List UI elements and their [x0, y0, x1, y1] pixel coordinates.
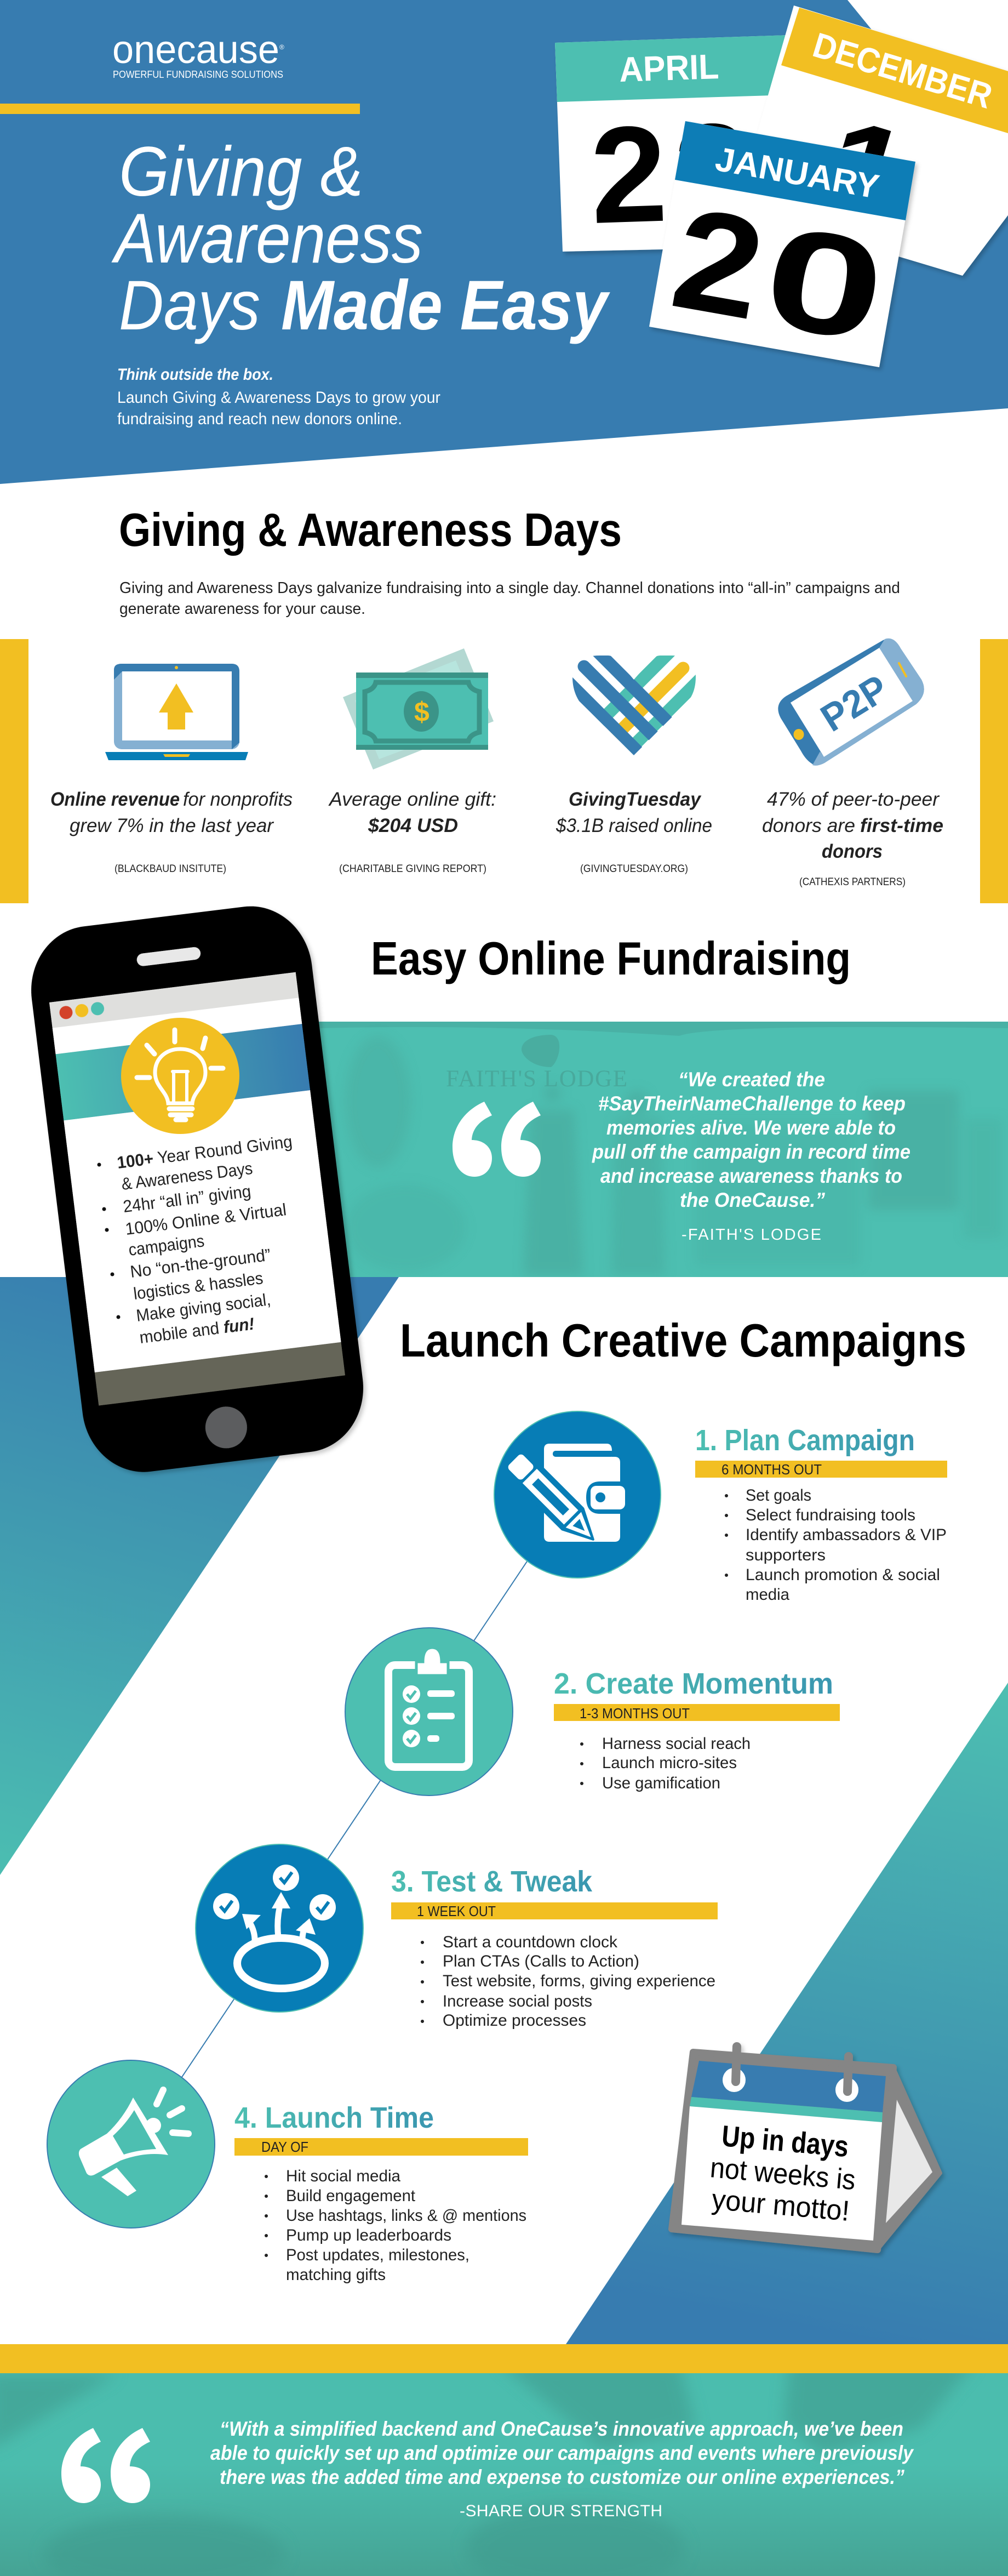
stat: peer-to-peer: first-time	[860, 815, 943, 836]
step 2: Create Momentum	[345, 1628, 840, 1796]
icon: megaphone	[47, 2060, 215, 2228]
stat: GivingTuesday	[555, 789, 712, 875]
stat: average online gift: Average online gift:	[328, 789, 496, 810]
quote text: pull off the campaign in record time	[592, 1141, 910, 1163]
stat: GivingTuesday: (GIVINGTUESDAY.ORG)	[580, 863, 688, 875]
phone list	[98, 1132, 293, 1347]
calendar text	[709, 2119, 857, 2227]
quote text: the OneCause.”	[680, 1189, 825, 1211]
title: Days	[119, 266, 260, 345]
hero intro text	[117, 366, 440, 428]
quote text: “We created the	[678, 1068, 825, 1091]
quote text: there was the added time and expense to customize our online experiences.”	[220, 2466, 904, 2488]
intro paragraph	[119, 579, 900, 618]
stat: online revenue	[50, 789, 293, 875]
phone list: campaigns	[128, 1231, 205, 1259]
phone list: & Awareness Days	[121, 1159, 254, 1194]
timing bar	[391, 1902, 718, 1919]
step heading: 2. Create Momentum	[554, 1667, 833, 1700]
task list: Start a countdown clock	[443, 1933, 618, 1951]
step 4: Launch Time	[47, 2060, 528, 2284]
stat: peer-to-peer: donors	[822, 841, 883, 862]
stat: online revenue: (BLACKBAUD INSITUTE)	[114, 863, 226, 875]
logo: onecause	[112, 28, 279, 72]
side bar left	[0, 639, 28, 903]
task list: Plan CTAs (Calls to Action)	[443, 1952, 639, 1970]
calendar page: December	[736, 5, 1008, 276]
stat: peer-to-peer: (CATHEXIS PARTNERS)	[799, 876, 906, 888]
stat: peer-to-peer	[762, 789, 943, 888]
stat: peer-to-peer: 47% of peer-to-peer	[767, 789, 940, 810]
panel: hero background	[0, 0, 1008, 484]
task list: Select fundraising tools	[746, 1506, 915, 1524]
calendar page: January: 2	[662, 177, 775, 350]
task list: Set goals	[746, 1486, 811, 1504]
desk calendar callout	[672, 2047, 941, 2250]
background diagonal left	[0, 1277, 399, 1875]
phone body	[24, 899, 371, 1479]
task list: Use hashtags, links & @ mentions	[286, 2207, 526, 2225]
icon: P2P phone: P2P	[814, 666, 896, 740]
logo: POWERFUL FUNDRAISING SOLUTIONS	[113, 69, 283, 80]
title: Giving &	[119, 133, 363, 211]
step heading: 3. Test & Tweak	[391, 1865, 593, 1898]
task list: media	[746, 1586, 789, 1604]
quote text: memories alive. We were able to	[606, 1116, 896, 1139]
calendar page: April	[555, 35, 813, 252]
intro paragraph: generate awareness for your cause.	[119, 600, 365, 618]
stat: online revenue: grew 7% in the last year	[70, 815, 274, 836]
calendar page: December: DECEMBER	[809, 25, 996, 116]
stat: peer-to-peer: donors are	[762, 815, 855, 836]
title: Awareness	[111, 200, 423, 278]
title: Made Easy	[281, 266, 610, 345]
calendar page: January: 0	[753, 195, 896, 373]
phone list: 100% Online & Virtual	[124, 1200, 288, 1239]
phone	[24, 899, 371, 1479]
stat: average online gift: $204 USD	[368, 815, 458, 836]
background diagonal right	[566, 1683, 1008, 2344]
task list: Identify ambassadors & VIP	[746, 1526, 947, 1544]
quote text: “With a simplified backend and OneCause’s innovative approach, we’ve been	[220, 2418, 903, 2440]
icon: money: $	[414, 697, 429, 727]
phone list: Make giving social,	[135, 1290, 272, 1325]
phone list: 100+ Year Round Giving	[116, 1132, 293, 1172]
task list: matching gifts	[286, 2266, 386, 2284]
quote text: able to quickly set up and optimize our campaigns and events where previously	[210, 2442, 914, 2464]
task list: Launch promotion & social	[746, 1566, 940, 1584]
phone list: No “on-the-ground”	[129, 1245, 272, 1281]
icon: arrows and checks	[196, 1844, 363, 2012]
hero accent bar	[0, 104, 360, 114]
logo: ®	[279, 43, 284, 51]
icon: laptop	[105, 664, 248, 760]
task list	[580, 1735, 751, 1792]
hero intro text: Launch Giving & Awareness Days to grow your	[117, 389, 440, 407]
stat: average online gift	[328, 789, 496, 875]
calendar page: April: 22	[588, 94, 753, 252]
calendar text: Up in days	[720, 2119, 850, 2163]
icon: quote mark	[453, 1102, 541, 1177]
phone list: mobile and fun!	[139, 1314, 255, 1347]
step heading: 1. Plan Campaign	[695, 1424, 915, 1457]
stat: average online gift: (CHARITABLE GIVING REPORT)	[339, 863, 486, 875]
quote text: #SayTheirNameChallenge to keep	[598, 1092, 906, 1115]
icon: money	[343, 648, 494, 770]
icon: light bulb	[121, 1018, 239, 1134]
heading: Easy Online Fundraising: Easy Online Fundraising	[371, 933, 851, 985]
photo texture	[0, 2373, 967, 2554]
calendar page: December: 1	[807, 88, 924, 257]
calendar text: your motto!	[711, 2184, 851, 2227]
task list: Use gamification	[602, 1774, 720, 1792]
icon: GivingTuesday heart	[572, 656, 696, 755]
quote text: -SHARE OUR STRENGTH	[460, 2502, 662, 2520]
timing bar	[234, 2138, 528, 2156]
heading: Launch Creative Campaigns: Launch Creative Campaigns	[400, 1315, 966, 1367]
timing bar: DAY OF	[261, 2139, 308, 2155]
timeline connector	[130, 1485, 578, 2154]
step 3: Test and Tweak	[196, 1844, 718, 2030]
task list: Optimize processes	[443, 2011, 586, 2030]
intro paragraph: Giving and Awareness Days galvanize fundraising into a single day. Channel donations into “all-in” campaigns and	[119, 579, 900, 597]
task list	[421, 1933, 715, 2030]
task list: Hit social media	[286, 2167, 400, 2185]
task list: Launch micro-sites	[602, 1754, 737, 1772]
hero intro text: fundraising and reach new donors online.	[117, 410, 402, 428]
icon: clipboard	[345, 1628, 513, 1796]
calendar text: not weeks is	[709, 2152, 857, 2196]
stat: GivingTuesday: GivingTuesday	[569, 789, 701, 810]
task list: Harness social reach	[602, 1735, 751, 1753]
quote text: -FAITH'S LODGE	[681, 1226, 821, 1244]
phone list: logistics & hassles	[133, 1268, 264, 1303]
calendar page: January	[649, 121, 915, 373]
task list: supporters	[746, 1546, 826, 1564]
icon: wallet and pencil	[494, 1411, 661, 1578]
heading: Giving and Awareness Days: Giving & Awareness Days	[119, 504, 622, 556]
photo texture	[318, 1022, 1008, 1275]
timing bar	[554, 1704, 840, 1722]
stat: online revenue: Online revenue	[50, 789, 180, 810]
title	[111, 133, 610, 345]
stat: online revenue: for nonprofits	[183, 789, 293, 810]
task list	[725, 1486, 947, 1604]
step heading: 4. Launch Time	[234, 2101, 434, 2134]
calendar page: January: JANUARY	[713, 140, 882, 206]
quote text: and increase awareness thanks to	[600, 1165, 902, 1187]
yellow divider band	[0, 2344, 1008, 2373]
task list: Post updates, milestones,	[286, 2246, 469, 2264]
timing bar	[695, 1461, 947, 1478]
stat: GivingTuesday: $3.1B raised online	[555, 815, 712, 836]
icon: quote mark	[61, 2428, 150, 2503]
icon: P2P phone	[778, 639, 924, 766]
phone list: 24hr “all in” giving	[122, 1182, 252, 1216]
task list: Increase social posts	[443, 1992, 592, 2010]
photo texture: FAITH'S LODGE	[446, 1066, 627, 1092]
step 1: Plan Campaign	[494, 1411, 947, 1604]
panel: Faith's Lodge quote	[274, 1022, 1008, 1277]
panel: Share Our Strength quote	[0, 2362, 1008, 2576]
quote text	[210, 2418, 914, 2520]
hero intro text: Think outside the box.	[117, 366, 273, 384]
side bar right	[980, 639, 1008, 903]
timing bar: 1 WEEK OUT	[417, 1903, 496, 1919]
timing bar: 1-3 MONTHS OUT	[580, 1705, 690, 1722]
calendar page: April: APRIL	[618, 47, 719, 89]
task list: Pump up leaderboards	[286, 2226, 451, 2244]
task list	[265, 2167, 526, 2284]
timing bar: 6 MONTHS OUT	[721, 1461, 822, 1478]
quote text	[592, 1068, 910, 1244]
task list: Build engagement	[286, 2187, 416, 2205]
task list: Test website, forms, giving experience	[443, 1972, 715, 1990]
